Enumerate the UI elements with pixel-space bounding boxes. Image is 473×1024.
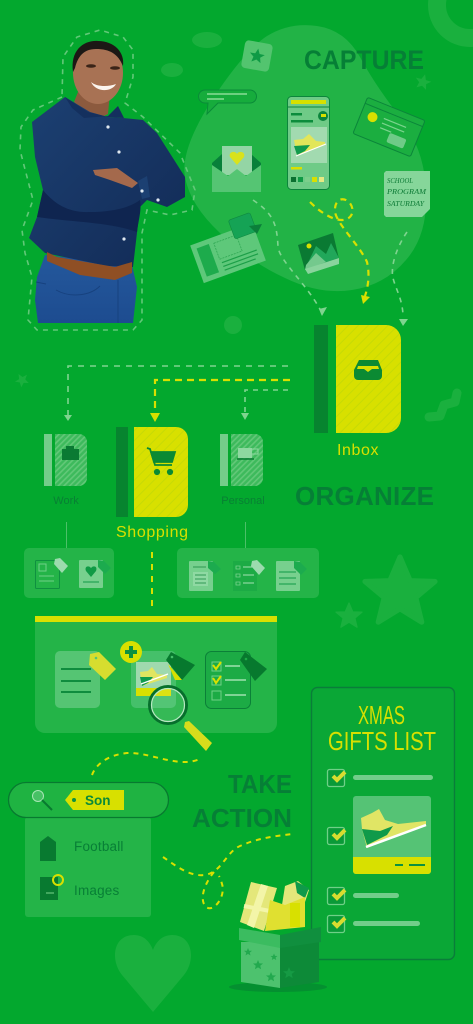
icon: tag: [40, 836, 56, 861]
notebook: personal: [220, 434, 265, 507]
icon: inbox tray: [354, 360, 382, 380]
box body: [241, 942, 280, 988]
check item 2 with shoe card: [328, 796, 431, 874]
icon: star tile: [241, 40, 273, 72]
connector lines: [66, 522, 246, 548]
heading: take action: TAKE: [228, 769, 292, 799]
dashed arrow: phone to inbox: [310, 199, 370, 304]
arrow heads: light capture arrows: [319, 307, 408, 326]
shirt: [29, 97, 185, 267]
belt: [47, 252, 132, 280]
search results panel: [25, 817, 151, 917]
inbox notebook: [314, 325, 401, 459]
icon: handwritten note: [384, 171, 430, 217]
gifts in box: [240, 881, 309, 931]
title: xmas gifts list: GIFTS LIST: [328, 726, 436, 756]
label: inbox: Inbox: [337, 442, 379, 459]
panel: tagged notes: [35, 616, 277, 751]
icon: search: [32, 790, 52, 810]
label: football: Football: [74, 839, 124, 854]
person: [29, 41, 185, 323]
heading: organize: ORGANIZE: [295, 481, 434, 511]
icon: phone: [288, 96, 330, 190]
panel: xmas gifts list: [312, 688, 454, 960]
label: work: Work: [53, 495, 79, 507]
check item 3: [328, 888, 399, 904]
stars on box: [244, 948, 278, 981]
shoe card with dark tag: [131, 651, 195, 708]
box lid: [239, 928, 280, 948]
neck and head: [73, 41, 123, 120]
icon: magnifier: [150, 686, 212, 751]
check item 4: [328, 916, 420, 932]
shoe: [361, 809, 426, 848]
heading: take action: ACTION: [192, 803, 292, 833]
jeans: [35, 255, 137, 323]
collar: [65, 97, 124, 118]
icon: handwritten note: SATURDAY: [387, 199, 425, 208]
panel: work items: [24, 548, 114, 598]
label: shopping: Shopping: [116, 524, 188, 541]
arrow heads: routes: [64, 413, 249, 422]
dashed path: search to gift: [163, 834, 293, 908]
icon: plus badge: [120, 641, 142, 663]
sleeve shadow: [37, 190, 141, 232]
notebook: shopping: [116, 427, 188, 541]
tag: son: Son: [85, 793, 110, 808]
tag: son: [65, 790, 124, 810]
icon: attached file: [40, 875, 63, 900]
icon: cart: [147, 448, 175, 474]
yellow dashed connector: [151, 552, 153, 612]
icon: briefcase: [62, 446, 79, 460]
icon: news card: [190, 212, 266, 283]
icon: handwritten note: SCHOOL: [387, 176, 413, 185]
checklist with dark tag: [206, 652, 267, 708]
shirt cuff: [138, 176, 150, 199]
notebook: work: [44, 434, 87, 507]
label: personal: Personal: [221, 495, 265, 507]
dashed path: notes to search: [92, 753, 202, 775]
icon: cup: [237, 448, 258, 459]
icon: handwritten note: PROGRAM: [386, 187, 427, 196]
dashed routes from inbox: [68, 366, 290, 416]
heading: capture: CAPTURE: [304, 45, 424, 75]
title: xmas gifts list: [328, 700, 436, 756]
jeans seams: [36, 280, 118, 323]
title: xmas gifts list: XMAS: [358, 700, 405, 730]
icon: speech bubble: [199, 90, 256, 114]
shirt buttons: [106, 125, 160, 241]
heading: take action: [192, 769, 292, 833]
person dashed outline: [20, 30, 195, 330]
panel: personal items: [177, 548, 319, 598]
capture blob: [184, 25, 426, 291]
icon: envelope with heart: [212, 146, 261, 192]
note with yellow tag: [55, 651, 116, 708]
icon: browser window: [353, 97, 425, 157]
dashed arrow: capture to inbox (note): [253, 200, 407, 317]
folded forearm: [93, 168, 138, 188]
label: images: Images: [74, 883, 120, 898]
search bar: [8, 782, 168, 818]
icon: photo: [298, 233, 339, 274]
gift box: [229, 881, 327, 992]
check item 1: [328, 770, 433, 786]
